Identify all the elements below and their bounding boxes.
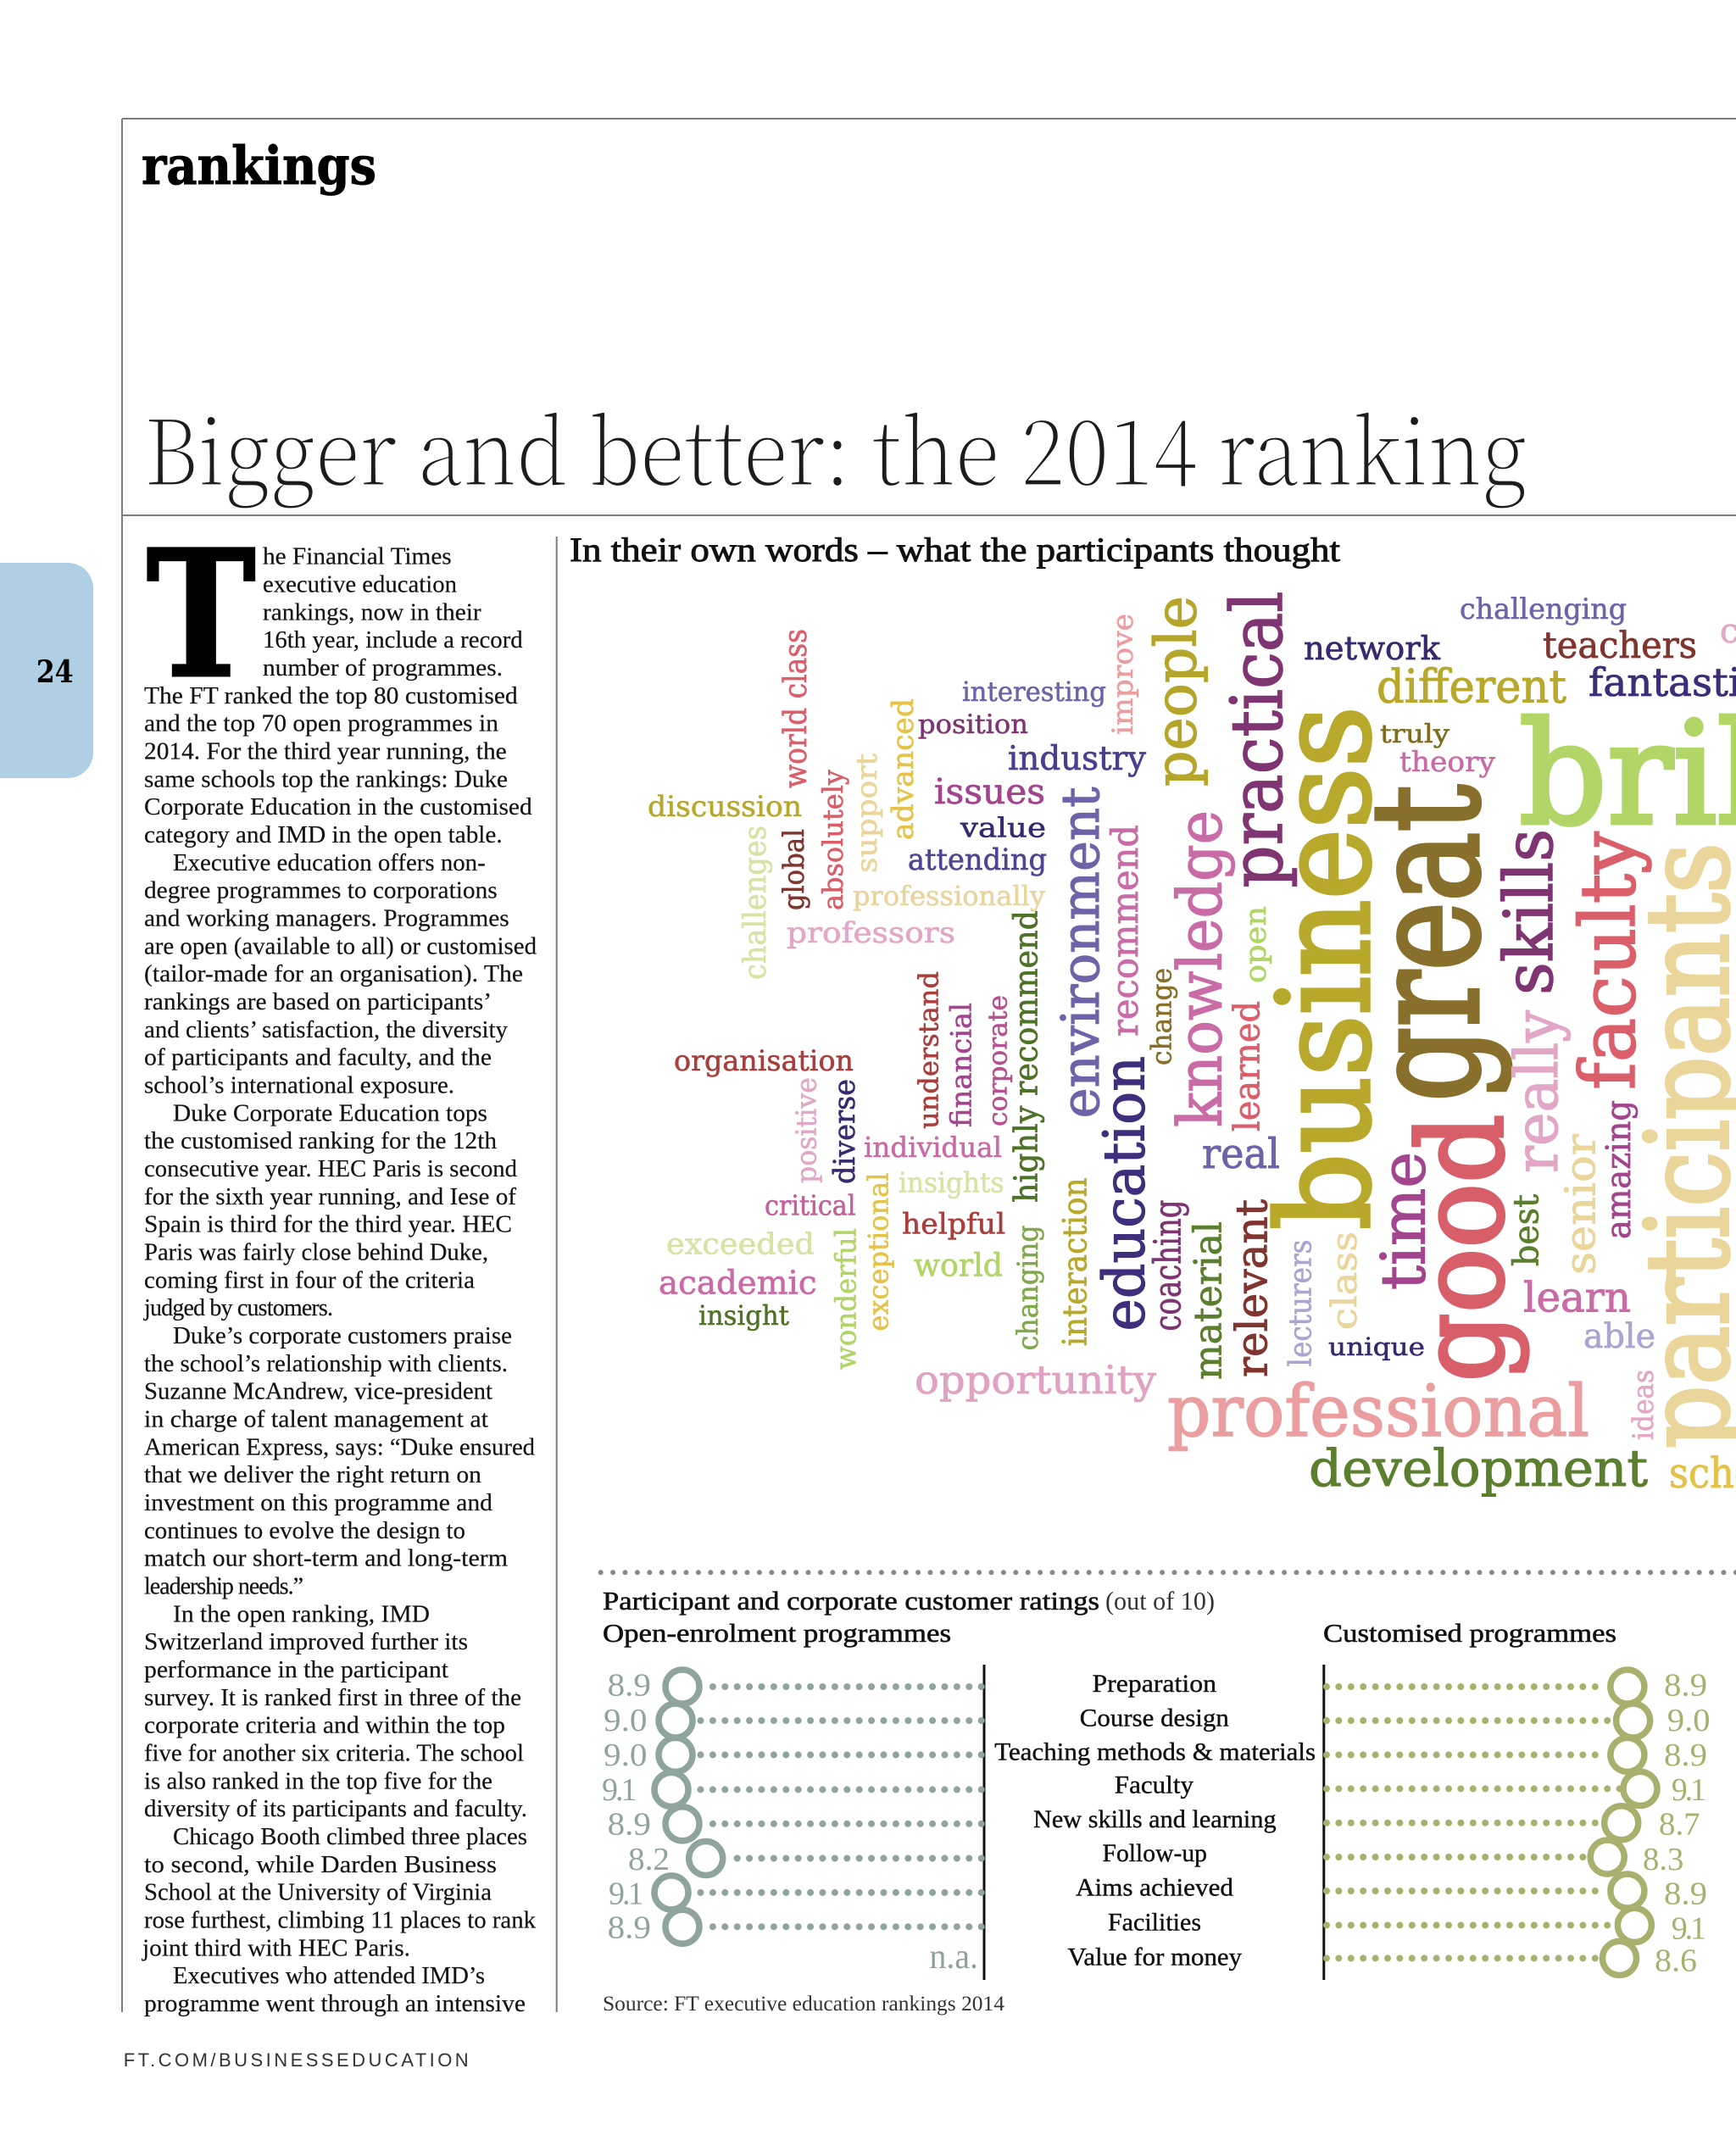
rating criteria labels: Preparation <box>1092 1670 1216 1698</box>
word cloud: great <box>1341 785 1513 1102</box>
paragraph 5: diversity of its participants and faculty. <box>144 1796 527 1822</box>
word cloud: theory <box>1399 745 1495 778</box>
word cloud: change <box>1144 968 1178 1065</box>
word cloud: positive <box>790 1077 823 1183</box>
paragraph 5: five for another six criteria. The school <box>144 1741 524 1766</box>
paragraph 3 <box>143 1100 517 1321</box>
paragraph 2: (tailor-made for an organisation). The <box>144 961 523 987</box>
paragraph 4: that we deliver the right return on <box>144 1462 481 1488</box>
word cloud: skills <box>1489 829 1568 995</box>
paragraph 5: survey. It is ranked first in three of the <box>144 1685 521 1711</box>
paragraph 1: executive education <box>263 571 457 598</box>
word cloud: learn <box>1523 1273 1631 1322</box>
article text column <box>142 512 537 2017</box>
chart: open-enrolment ratings: n.a. <box>929 1938 978 1977</box>
paragraph 5: In the open ranking, IMD <box>173 1601 430 1627</box>
word cloud: position <box>918 709 1028 740</box>
word cloud: time <box>1368 1152 1439 1290</box>
word cloud: corporate <box>983 995 1014 1126</box>
paragraph 3: the customised ranking for the 12th <box>144 1128 497 1154</box>
chart: open-enrolment ratings: 8.9 <box>608 1806 651 1842</box>
chart: customised ratings: 9.0 <box>1667 1703 1711 1738</box>
rating criteria labels: Value for money <box>1068 1943 1242 1971</box>
word cloud: development <box>1309 1439 1648 1499</box>
word cloud: good <box>1394 1114 1530 1382</box>
word cloud: practical <box>1216 592 1299 888</box>
word cloud: material <box>1185 1221 1230 1380</box>
word cloud: professors <box>787 916 955 950</box>
chart: customised ratings: 8.9 <box>1664 1738 1707 1773</box>
rating criteria labels: Facilities <box>1108 1909 1201 1936</box>
word cloud: really <box>1502 1010 1572 1173</box>
paragraph 1: number of programmes. <box>263 655 503 681</box>
paragraph 3: for the sixth year running, and Iese of <box>144 1184 517 1210</box>
word cloud: discussion <box>648 790 802 824</box>
rating criteria labels: Aims achieved <box>1076 1873 1233 1901</box>
paragraph 6: joint third with HEC Paris. <box>142 1935 410 1961</box>
paragraph 4: Suzanne McAndrew, vice-president <box>144 1379 492 1405</box>
paragraph 3: Duke Corporate Education tops <box>173 1100 487 1126</box>
paragraph 3: consecutive year. HEC Paris is second <box>144 1156 517 1182</box>
word cloud: teachers <box>1543 625 1697 667</box>
paragraph 2: and clients’ satisfaction, the diversity <box>144 1017 508 1043</box>
paragraph 5: performance in the participant <box>144 1657 448 1683</box>
paragraph 2: and working managers. Programmes <box>144 905 509 932</box>
section label: rankings: rankings <box>142 135 376 197</box>
paragraph 5: Switzerland improved further its <box>144 1629 468 1655</box>
word cloud: changing <box>1011 1225 1045 1350</box>
paragraph 4: American Express, says: “Duke ensured <box>144 1434 535 1460</box>
paragraph 4: continues to evolve the design to <box>144 1518 465 1544</box>
paragraph 1: 2014. For the third year running, the <box>144 739 507 765</box>
word cloud: financial <box>945 1003 979 1127</box>
paragraph 4: leadership needs.” <box>144 1573 303 1600</box>
paragraph 1: category and IMD in the open table. <box>144 822 503 848</box>
word cloud: world <box>914 1247 1003 1283</box>
word cloud: exceeded <box>666 1227 815 1261</box>
word cloud heading: In their own words – what the participants thought <box>570 531 1340 569</box>
word cloud: attending <box>908 843 1047 877</box>
word cloud: interesting <box>962 676 1106 708</box>
column heading: open-enrolment: Open-enrolment programmes <box>603 1618 951 1648</box>
paragraph 3: Spain is third for the third year. HEC <box>144 1212 512 1238</box>
word cloud: individual <box>864 1131 1002 1164</box>
rating criteria labels: Teaching methods & materials <box>994 1738 1316 1766</box>
word cloud: knowledge <box>1164 810 1235 1127</box>
word cloud: support <box>850 753 884 873</box>
word cloud: relevant <box>1227 1199 1277 1377</box>
chart: customised ratings: 8.3 <box>1643 1842 1683 1877</box>
chart: customised ratings: 9.1 <box>1672 1772 1706 1808</box>
chart: customised ratings: 8.9 <box>1664 1876 1707 1911</box>
paragraph 6: School at the University of Virginia <box>144 1880 492 1906</box>
chart: open-enrolment ratings: 8.9 <box>608 1910 651 1945</box>
word cloud: academic <box>659 1264 817 1301</box>
word cloud: challenges <box>738 826 773 980</box>
word cloud: class <box>1324 1232 1365 1330</box>
word cloud: learned <box>1226 1001 1268 1132</box>
word cloud: unique <box>1328 1332 1425 1361</box>
chart: customised ratings: 8.9 <box>1664 1668 1707 1704</box>
paragraph 2: degree programmes to corporations <box>144 878 498 904</box>
word cloud: able <box>1583 1317 1655 1356</box>
paragraph 1: Corporate Education in the customised <box>144 794 532 820</box>
paragraph 1 <box>144 544 532 848</box>
word cloud: value <box>960 812 1046 844</box>
word cloud: organisation <box>674 1044 854 1078</box>
rating criteria labels: Faculty <box>1115 1771 1194 1799</box>
paragraph 2 <box>144 850 537 1098</box>
word cloud: improve <box>1106 614 1140 735</box>
title: Bigger and better: the 2014 ranking <box>144 381 1527 511</box>
word cloud <box>648 592 1736 1499</box>
word cloud: business <box>1251 706 1399 1230</box>
paragraph 2: Executive education offers non- <box>173 850 486 876</box>
word cloud: wonderful <box>829 1228 863 1370</box>
word cloud: highly recommend <box>1007 910 1044 1203</box>
word cloud: best <box>1505 1193 1546 1266</box>
word cloud: issues <box>934 771 1045 812</box>
source note: Source: FT executive education rankings 2014 <box>603 1993 1004 2016</box>
word cloud: challenging <box>1460 592 1627 626</box>
paragraph 6 <box>142 1824 536 1961</box>
word cloud: insights <box>899 1166 1004 1199</box>
paragraph 5 <box>144 1601 527 1822</box>
paragraph 6: rose furthest, climbing 11 places to rank <box>144 1907 536 1934</box>
word cloud: network <box>1304 630 1441 667</box>
page tab with number 24: 24 <box>36 654 74 690</box>
paragraph 4: Duke’s corporate customers praise <box>173 1323 512 1349</box>
paragraph 1: same schools top the rankings: Duke <box>144 766 508 792</box>
chart: open-enrolment ratings: 8.9 <box>608 1668 651 1704</box>
paragraph 3: coming first in four of the criteria <box>144 1267 476 1293</box>
paragraph 2: rankings are based on participants’ <box>144 989 492 1015</box>
paragraph 4: in charge of talent management at <box>144 1407 488 1432</box>
word cloud: lecturers <box>1284 1239 1319 1366</box>
paragraph 1: he Financial Times <box>263 544 452 570</box>
word cloud: exceptional <box>861 1173 895 1331</box>
rating criteria labels: Course design <box>1080 1704 1229 1732</box>
word cloud: environment <box>1049 787 1111 1118</box>
footer url: FT.COM/BUSINESSEDUCATION <box>124 2049 469 2071</box>
chart: open-enrolment ratings: 9.0 <box>604 1703 648 1738</box>
word cloud: different <box>1377 660 1566 714</box>
chart: open-enrolment ratings: 8.2 <box>628 1842 670 1877</box>
word cloud: interaction <box>1056 1177 1094 1346</box>
word cloud: global <box>777 829 811 910</box>
word cloud: opportunity <box>915 1357 1156 1403</box>
paragraph 2: of participants and faculty, and the <box>144 1045 492 1071</box>
word cloud: insight <box>698 1299 789 1332</box>
word cloud: world class <box>777 629 814 788</box>
paragraph 3: judged by customers. <box>143 1295 333 1321</box>
chart: open-enrolment ratings: 9.1 <box>602 1772 637 1808</box>
ratings heading: Participant and corporate customer ratings <box>603 1586 1099 1615</box>
word cloud: truly <box>1380 720 1449 749</box>
chart: open-enrolment ratings <box>602 1665 984 1980</box>
rating criteria labels <box>994 1670 1316 1971</box>
rating criteria labels: Follow-up <box>1102 1839 1207 1867</box>
paragraph 4: the school’s relationship with clients. <box>144 1351 508 1377</box>
page tab with number 24 <box>0 563 93 778</box>
paragraph 7: programme went through an intensive <box>144 1991 526 2017</box>
word cloud: ideas <box>1627 1370 1661 1440</box>
paragraph 5: is also ranked in the top five for the <box>144 1768 492 1794</box>
chart: open-enrolment ratings: 9.0 <box>604 1738 648 1773</box>
word cloud: amazing <box>1600 1100 1639 1239</box>
word cloud: senior <box>1556 1134 1605 1275</box>
word cloud: diverse <box>828 1079 862 1184</box>
column heading: customised: Customised programmes <box>1323 1618 1616 1648</box>
paragraph 5: corporate criteria and within the top <box>144 1713 505 1739</box>
chart: customised ratings: 8.6 <box>1655 1943 1697 1979</box>
chart: customised ratings: 9.1 <box>1672 1910 1706 1946</box>
paragraph 6: to second, while Darden Business <box>144 1852 497 1878</box>
word cloud: faculty <box>1564 831 1653 1090</box>
paragraph 2: school’s international exposure. <box>144 1073 454 1098</box>
paragraph 1: 16th year, include a record <box>263 627 523 653</box>
word cloud: recommend <box>1104 825 1147 1037</box>
word cloud: understand <box>912 971 944 1129</box>
paragraph 1: The FT ranked the top 80 customised <box>144 683 518 709</box>
word cloud: open <box>1239 906 1273 983</box>
chart: customised ratings: 8.7 <box>1659 1806 1700 1842</box>
paragraph 4 <box>144 1323 535 1600</box>
drop cap T: T <box>147 512 256 717</box>
word cloud: real <box>1202 1130 1280 1178</box>
word cloud: advanced <box>887 698 921 840</box>
word cloud: coaching <box>1147 1200 1190 1331</box>
word cloud: people <box>1143 596 1209 787</box>
paragraph 3: Paris was fairly close behind Duke, <box>144 1239 488 1266</box>
word cloud: professionally <box>853 880 1045 912</box>
paragraph 4: match our short-term and long-term <box>144 1546 508 1572</box>
word cloud: critical <box>765 1188 856 1221</box>
paragraph 1: and the top 70 open programmes in <box>144 711 498 737</box>
rating criteria labels: New skills and learning <box>1033 1805 1277 1833</box>
chart: open-enrolment ratings: 9.1 <box>609 1876 644 1911</box>
paragraph 7: Executives who attended IMD’s <box>173 1963 485 1989</box>
paragraph 2: are open (available to all) or customised <box>144 933 537 959</box>
paragraph 1: rankings, now in their <box>263 599 481 626</box>
word cloud: education <box>1092 1056 1158 1331</box>
paragraph 7 <box>144 1963 526 2017</box>
word cloud: professional <box>1167 1370 1589 1453</box>
word cloud: industry <box>1008 740 1146 778</box>
paragraph 4: investment on this programme and <box>144 1490 492 1516</box>
word cloud: helpful <box>902 1208 1005 1242</box>
paragraph 6: Chicago Booth climbed three places <box>173 1824 527 1850</box>
ratings heading: (out of 10) <box>1105 1586 1215 1615</box>
word cloud: absolutely <box>816 770 849 910</box>
chart: customised ratings <box>1324 1665 1711 1980</box>
